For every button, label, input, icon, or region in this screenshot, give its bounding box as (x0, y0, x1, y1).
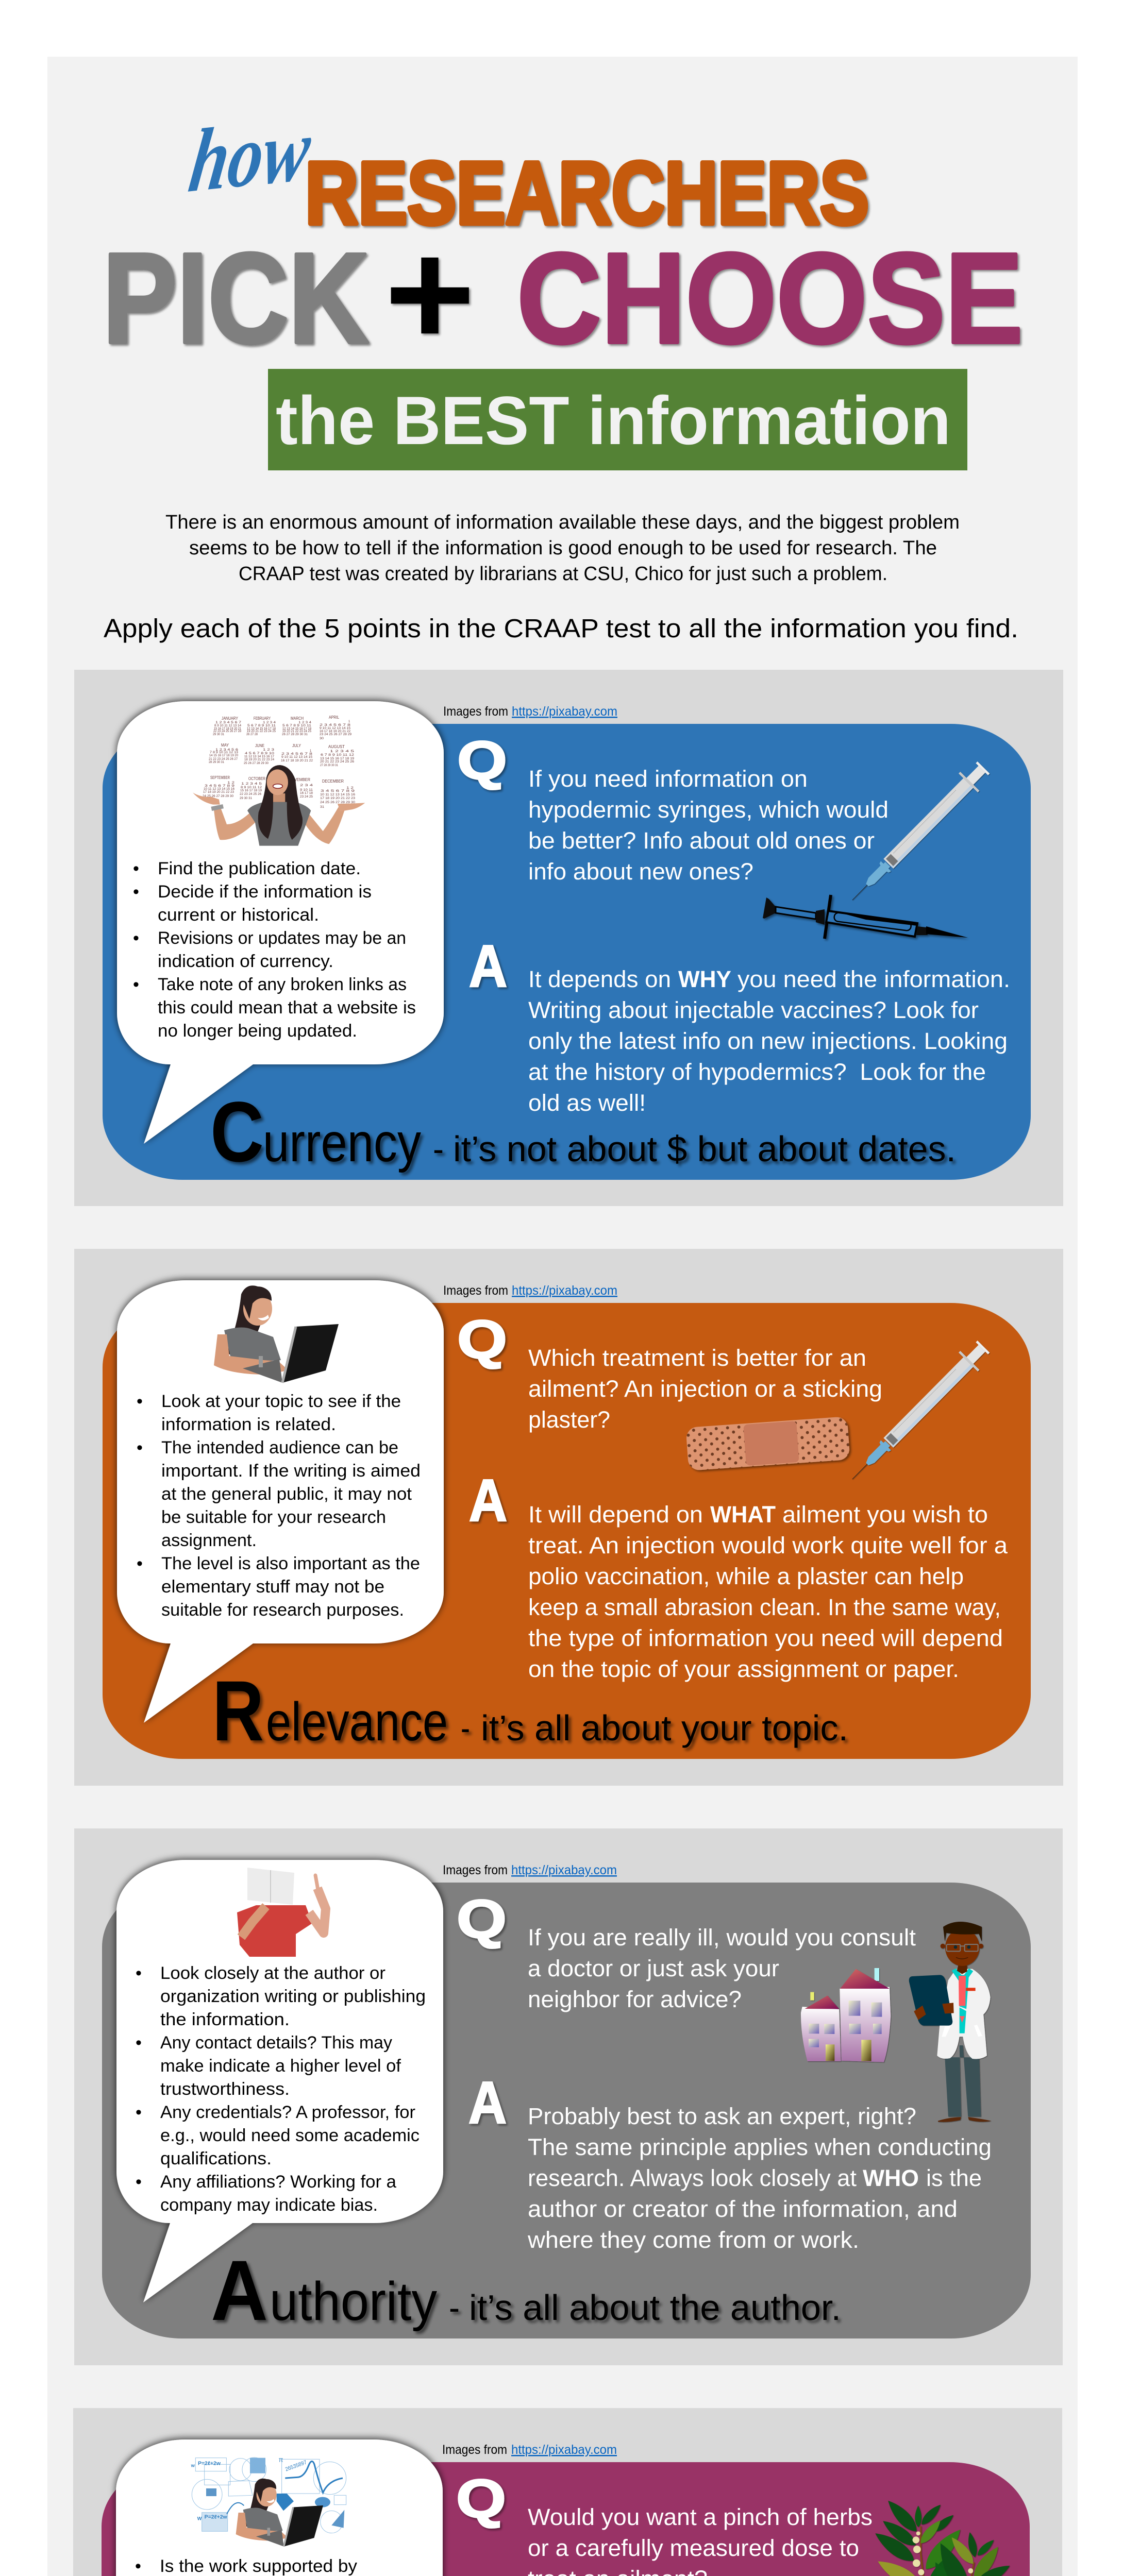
answer text: where they come from or work. (527, 2227, 859, 2253)
speech bubble (117, 701, 444, 1144)
illustration: calendars: 17 18 19 20 21 22 23 (320, 797, 356, 800)
answer text (527, 2103, 992, 2253)
bullet list: Look at your topic to see if the (161, 1392, 401, 1411)
illustration: hospital building (801, 1968, 891, 2062)
bullet list: no longer being updated. (158, 1021, 357, 1041)
bullet list: • (135, 2556, 141, 2576)
answer text: The same principle applies when conducting (528, 2134, 992, 2160)
illustration: calendars: 1 2 3 4 5 6 (215, 749, 239, 752)
bullet list: Revisions or updates may be an (158, 928, 406, 948)
illustration: woman shrugging (193, 765, 365, 846)
illustration: calendars: 9 10 11 (300, 789, 313, 792)
illustration: calendars: MAY (221, 743, 229, 748)
illustration: calendars: 16 17 18 19 20 21 22 (320, 730, 351, 733)
question text: If you need information on (528, 766, 808, 792)
bullet list: • (136, 2172, 142, 2192)
answer text: only the latest info on new injections. Looking (528, 1028, 1008, 1054)
image credit: Images from (443, 704, 508, 719)
question text: Would you want a pinch of herbs (528, 2504, 873, 2530)
question text: info about new ones? (528, 858, 753, 885)
bullet list: Any credentials? A professor, for (160, 2103, 415, 2122)
question text: ailment? An injection or a sticking (528, 1376, 882, 1402)
question text (528, 2504, 873, 2576)
illustration: maths line art: P=2ℓ+2w (205, 2514, 227, 2520)
illustration: calendars: 16 17 18 (300, 792, 313, 795)
grey card (102, 1883, 1031, 2338)
bullet list: elementary stuff may not be (161, 1577, 384, 1597)
heading: Relevance: R (212, 1664, 264, 1759)
illustration: calendars: 15 16 17 18 19 20 21 (214, 727, 242, 731)
illustration: maths line art: W (197, 2516, 202, 2521)
bullet list: Is the work supported by (160, 2556, 357, 2576)
illustration: woman at laptop (214, 1285, 339, 1383)
bullet list: indication of currency. (158, 952, 333, 971)
illustration: calendars: 7 8 9 10 11 12 13 (210, 751, 239, 754)
bullet list: the information. (160, 2010, 290, 2029)
bullet list: assignment. (161, 1531, 257, 1550)
illustration: calendars: 3 4 5 6 7 8 9 (321, 790, 355, 793)
illustration: maths line art (191, 2456, 346, 2533)
illustration: calendars: 19 20 21 22 23 24 25 (247, 730, 276, 733)
illustration: calendars: 29 30 31 (240, 797, 253, 800)
illustration: calendars: 28 29 30 31 (209, 761, 225, 764)
illustration: herb sprig (871, 2497, 1014, 2576)
answer text (528, 966, 1010, 1116)
Q letter: Q (457, 731, 507, 791)
illustration: calendars: 1 2 3 4 (263, 721, 276, 724)
heading: Authority (211, 2243, 841, 2338)
bullet list: • (136, 1963, 142, 1983)
intro text: CRAAP test was created by librarians at CSU, Chico for just such a problem. (239, 563, 887, 585)
illustration: man with paper over face (237, 1868, 326, 1957)
illustration: calendars: 10 11 12 13 14 15 16 (320, 793, 356, 796)
instruction line: Apply each of the 5 points in the CRAAP test to all the information you find. (104, 614, 1018, 643)
speech bubble (116, 1860, 443, 2302)
question text: plaster? (528, 1406, 610, 1433)
illustration: calendars: 19 20 21 22 23 24 25 (282, 730, 312, 733)
illustration: woman at laptop (236, 2479, 323, 2547)
illustration: maths line art: π (279, 2456, 283, 2463)
heading: Authority: it’s all about the author. (469, 2287, 841, 2328)
panel: Authority (74, 1828, 1063, 2365)
illustration: calendars: 1 2 3 (263, 749, 275, 752)
bullet list: Take note of any broken links as (158, 975, 407, 994)
illustration: calendars: 1 (348, 720, 350, 723)
bullet list: this could mean that a website is (158, 998, 416, 1018)
illustration: calendars: 26 27 28 (246, 733, 258, 736)
answer text: WHAT (710, 1501, 776, 1528)
bullet list: • (133, 928, 139, 948)
image credit: https://pixabay.com (512, 704, 617, 719)
question text (528, 1345, 882, 1433)
illustration: calendars (203, 715, 356, 809)
bullet list (137, 1392, 421, 1620)
bullet list: organization writing or publishing (160, 1987, 426, 2006)
panel: Relevance (74, 1249, 1063, 1786)
bullet list: • (136, 2033, 142, 2053)
illustration: calendars: 1 2 3 4 5 (241, 783, 262, 786)
orange card (103, 1303, 1031, 1759)
answer text: polio vaccination, while a plaster can help (528, 1563, 964, 1589)
answer text: WHO (863, 2165, 919, 2191)
illustration: calendars: 1 (310, 750, 312, 753)
illustration: calendars: 14 15 16 17 18 19 20 (209, 754, 239, 757)
heading: Currency: - (433, 1129, 444, 1169)
bullet list (133, 859, 416, 1041)
illustration: calendars: 9 10 11 12 13 14 15 (320, 727, 351, 730)
illustration: calendars: 24 25 26 27 28 29 30 (203, 795, 234, 798)
illustration: calendars: 18 19 20 21 22 23 24 (244, 758, 275, 761)
bullet list: information is related. (161, 1415, 336, 1434)
bullet list: suitable for research purposes. (161, 1600, 404, 1620)
answer text: research. Always look closely at (528, 2165, 857, 2191)
illustration: calendars: SEPTEMBER (210, 775, 230, 780)
illustration: calendars: 5 6 7 8 9 10 11 (247, 724, 276, 727)
bullet list: • (133, 859, 139, 878)
illustration: calendars: 24 25 26 27 28 29 30 (320, 801, 356, 804)
title word: CHOOSE: CHOOSE (517, 226, 1023, 370)
illustration: calendars: 16 17 18 19 20 21 22 (281, 759, 313, 762)
illustration: calendars: MARCH (291, 716, 304, 721)
illustration: calendars: FEBRUARY (254, 716, 271, 721)
illustration: calendars: AUGUST (328, 744, 345, 749)
illustration: calendars: 3 4 5 6 7 8 9 (205, 785, 235, 788)
heading: Authority: A (211, 2243, 268, 2338)
bullet list: Find the publication date. (158, 859, 361, 878)
Q letter: Q (456, 2469, 506, 2529)
heading: Currency (210, 1084, 956, 1180)
answer text: on the topic of your assignment or paper. (528, 1656, 959, 1682)
answer text: old as well! (528, 1090, 646, 1116)
illustration: calendars: 12 13 14 15 16 17 18 (247, 727, 276, 731)
illustration: calendars: 2 3 4 (300, 784, 313, 787)
bullet list: company may indicate bias. (160, 2195, 378, 2215)
bullet list: trustworthiness. (160, 2079, 290, 2099)
bullet list (136, 1963, 426, 2215)
illustration: calendars: 20 21 22 23 24 25 26 (320, 760, 355, 764)
illustration: calendars: 1 2 3 4 5 (330, 750, 355, 753)
illustration: calendars: 27 28 29 30 31 (320, 764, 339, 767)
Q letter: Q (457, 1889, 507, 1950)
answer text: author or creator of the information, and (528, 2196, 958, 2222)
illustration: syringe (843, 1337, 993, 1488)
bullet list: Look closely at the author or (160, 1963, 385, 1983)
answer text: you need the information. (738, 966, 1010, 992)
answer text: Probably best to ask an expert, right? (528, 2103, 916, 2129)
bullet list: The intended audience can be (161, 1438, 398, 1458)
illustration: calendars: 4 5 6 7 8 9 10 (245, 752, 275, 755)
illustration: calendars: 10 11 12 13 14 15 16 (204, 788, 235, 791)
answer text: It depends on (528, 966, 671, 992)
illustration: doctor (909, 1922, 991, 2122)
bullet list: • (133, 882, 139, 902)
illustration: calendars: JANUARY (222, 716, 239, 721)
bullet list: important. If the writing is aimed (161, 1461, 421, 1481)
illustration: calendars: 22 23 24 25 26 (240, 793, 262, 796)
bullet list: e.g., would need some academic (160, 2126, 420, 2145)
illustration: calendars: 26 27 28 29 30 31 (282, 733, 308, 736)
title word: how: how (184, 98, 317, 211)
answer text: Writing about injectable vaccines? Look for (528, 997, 979, 1023)
image credit: https://pixabay.com (512, 1283, 617, 1298)
illustration: calendars: 25 26 27 28 29 30 (244, 762, 269, 765)
bullet list (135, 2556, 426, 2576)
blue card (103, 724, 1031, 1180)
illustration: calendars: 30 (320, 737, 324, 740)
answer text (528, 1501, 1008, 1682)
heading: Relevance (212, 1664, 848, 1759)
answer text: WHY (678, 966, 731, 992)
illustration: calendars: OCTOBER (248, 776, 265, 781)
intro text: seems to be how to tell if the information is good enough to be used for research. The (189, 537, 937, 559)
panel: Currency (74, 670, 1063, 1206)
bullet list: current or historical. (158, 905, 319, 925)
question text: be better? Info about old ones or (528, 827, 875, 854)
speech bubble (117, 1280, 444, 1723)
question text: a doctor or just ask your (528, 1955, 779, 1981)
illustration: calendars: 13 14 15 16 17 18 19 (320, 757, 355, 760)
illustration: calendars: 1 2 (227, 782, 235, 785)
illustration: calendars: 1 2 (346, 787, 354, 790)
question text (528, 766, 889, 885)
illustration: calendars: 23 24 25 26 27 28 29 (320, 733, 352, 736)
question text: If you are really ill, would you consult (528, 1924, 916, 1951)
illustration: calendars: 12 13 14 15 16 17 18 (282, 727, 312, 731)
question text: neighbor for advice? (528, 1986, 742, 2012)
green banner: the BEST information: the BEST information (276, 383, 951, 459)
answer text: is the (926, 2165, 982, 2191)
question text: Which treatment is better for an (528, 1345, 866, 1371)
illustration: calendars: APRIL (329, 715, 339, 720)
heading: Relevance: it’s all about your topic. (481, 1708, 848, 1748)
illustration: maths line art: w (191, 2463, 195, 2468)
illustration: maths line art: P=2ℓ+2w (198, 2461, 221, 2467)
illustration: calendars: 1 2 3 4 (298, 721, 312, 724)
heading: Authority: uthority (270, 2271, 437, 2332)
heading: Relevance: elevance (266, 1691, 448, 1752)
bullet list: • (133, 975, 139, 994)
question text: hypodermic syringes, which would (528, 796, 889, 823)
bullet list: • (137, 1438, 143, 1458)
title (103, 98, 1023, 377)
speech bubble (116, 2439, 443, 2576)
bullet list: • (136, 2103, 142, 2122)
illustration: calendars: 9 10 11 12 13 14 15 (281, 756, 313, 759)
illustration: calendars: 8 9 10 11 12 13 14 (214, 724, 242, 727)
plum card (102, 2462, 1030, 2576)
Q letter: Q (457, 1310, 507, 1370)
answer text: keep a small abrasion clean. In the same way, (528, 1594, 1001, 1620)
bullet list: • (137, 1392, 143, 1411)
illustration: calendars: 22 23 24 25 26 27 28 (213, 730, 242, 733)
illustration: modern syringe (843, 758, 993, 909)
illustration: calendars: 31 (320, 806, 325, 809)
title word: RESEARCHERS: RESEARCHERS (305, 144, 869, 243)
illustration: antique syringe (763, 895, 968, 939)
heading: Authority: - (449, 2287, 460, 2328)
illustration: calendars: 11 12 13 14 15 16 17 (244, 755, 275, 758)
illustration: calendars: 21 22 23 24 25 26 27 (209, 758, 238, 761)
illustration: calendars: 2 3 4 5 6 7 8 (281, 753, 313, 756)
bullet list: The level is also important as the (161, 1554, 420, 1573)
bullet list: Decide if the information is (158, 882, 372, 902)
answer text: treat. An injection would work quite well for a (528, 1532, 1008, 1558)
bullet list: Any affiliations? Working for a (160, 2172, 396, 2192)
image credit: Images from (442, 2443, 507, 2457)
image credit: https://pixabay.com (511, 1863, 617, 1877)
heading: Currency: it’s not about $ but about dates. (453, 1129, 956, 1169)
answer text: It will depend on (528, 1501, 703, 1528)
illustration: calendars: 17 18 19 20 21 22 23 (203, 791, 234, 794)
image credit: https://pixabay.com (511, 2443, 617, 2457)
illustration: calendars: 8 9 10 11 12 (241, 786, 262, 789)
answer text: at the history of hypodermics? Look for the (528, 1059, 986, 1085)
illustration: calendars: 29 30 31 (213, 733, 225, 736)
illustration: maths line art: 26535897 (284, 2459, 308, 2472)
bullet list: qualifications. (160, 2149, 272, 2168)
A letter: A (469, 934, 507, 999)
illustration: calendars: 5 6 7 8 9 10 11 (282, 724, 312, 727)
illustration: calendars: 2 3 4 5 6 7 8 (320, 724, 351, 727)
heading: Currency: urrency (263, 1112, 421, 1173)
A letter: A (468, 2070, 507, 2136)
heading: Relevance: - (461, 1708, 470, 1748)
image credit: Images from (443, 1283, 508, 1298)
bullet list: • (137, 1554, 143, 1573)
bullet list: make indicate a higher level of (160, 2056, 401, 2076)
answer text: ailment you wish to (782, 1501, 988, 1528)
A letter: A (469, 1468, 507, 1534)
question text: or a carefully measured dose to (528, 2535, 859, 2561)
answer text: the type of information you need will depend (528, 1625, 1003, 1651)
illustration: calendars: DECEMBER (322, 779, 344, 784)
bullet list: be suitable for your research (161, 1507, 386, 1527)
bullet list: Any contact details? This may (160, 2033, 392, 2053)
illustration: sticking plaster (685, 1416, 850, 1471)
illustration: calendars: JULY (292, 743, 301, 748)
heading: Currency: C (210, 1084, 264, 1180)
illustration: calendars: 15 16 17 18 19 (240, 789, 262, 792)
illustration: calendars: JUNE (255, 743, 264, 748)
image credit: Images from (443, 1863, 508, 1877)
illustration: calendars: 6 7 8 9 10 11 12 (321, 754, 355, 757)
title word: PICK: PICK (103, 226, 369, 370)
illustration: calendars: 1 2 3 4 5 6 7 (215, 721, 242, 724)
panel: Accuracy (73, 2408, 1062, 2576)
illustration: calendars: 23 24 25 (300, 795, 313, 799)
intro text (165, 512, 960, 585)
bullet list: at the general public, it may not (161, 1484, 412, 1504)
intro text: There is an enormous amount of information available these days, and the biggest problem (165, 512, 960, 533)
question text (528, 1924, 916, 2012)
title plus sign: + (384, 210, 475, 377)
illustration: calendars: NOVEMBER (289, 777, 310, 782)
